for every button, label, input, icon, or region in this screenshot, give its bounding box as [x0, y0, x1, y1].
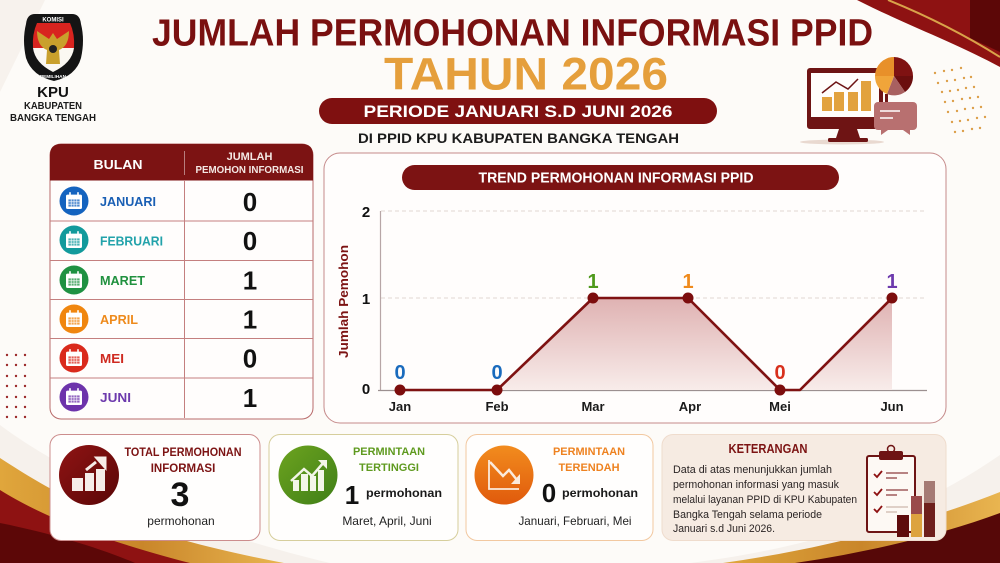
card: keterangan: KETERANGAN — [728, 442, 808, 456]
logo: KPU: BANGKA TENGAH — [10, 113, 96, 124]
row: Januari — [60, 186, 257, 217]
card: terendah: permohonan — [562, 486, 638, 500]
row: Maret — [60, 266, 257, 296]
card: tertinggi: permohonan — [366, 486, 442, 500]
line chart: 1 — [587, 271, 599, 293]
row: April — [60, 304, 257, 334]
subtitle: year: TAHUN 2026 — [384, 48, 668, 100]
title: JUMLAH PERMOHONAN INFORMASI PPID — [152, 12, 873, 54]
period pill — [319, 98, 717, 124]
logo: KPU: KABUPATEN — [24, 101, 82, 112]
row: Februari: 0 — [243, 226, 257, 256]
card: terendah — [466, 434, 653, 540]
logo: KPU: PEMILIHAN — [40, 74, 66, 79]
icon: growth chart — [278, 446, 338, 504]
card: tertinggi — [269, 434, 458, 540]
row: Februari: FEBRUARI — [100, 234, 163, 248]
line chart: 2 — [362, 204, 370, 221]
line chart: 1 — [362, 291, 370, 308]
table header: JUMLAH — [227, 151, 272, 163]
period pill: PERIODE JANUARI S.D JUNI 2026 — [364, 102, 672, 121]
chart title pill — [402, 165, 839, 190]
card: terendah: TERENDAH — [558, 462, 620, 474]
explanation text: Januari s.d Juni 2026. — [673, 523, 775, 535]
logo: KPU: KOMISI — [42, 18, 64, 24]
icon: rising bars — [59, 445, 119, 505]
line chart: 0 — [491, 362, 503, 384]
row: Januari: 0 — [243, 187, 257, 217]
row: Maret: MARET — [100, 273, 145, 288]
decoration: top right swoosh — [857, 0, 1000, 67]
card: total: permohonan — [147, 514, 215, 528]
explanation text — [673, 464, 857, 535]
card: total: TOTAL PERMOHONAN — [124, 447, 242, 459]
icon: monitor with charts — [800, 57, 917, 144]
row: Juni — [60, 382, 257, 413]
card: terendah: 0 — [542, 478, 556, 508]
line chart: 0 — [774, 362, 786, 384]
card: keterangan — [662, 434, 946, 540]
row: Mei — [60, 344, 257, 374]
icon: falling chart — [474, 446, 534, 504]
row: Juni: JUNI — [100, 390, 131, 405]
explanation text: melalui layanan PPID di KPU Kabupaten — [673, 494, 857, 506]
card: total: INFORMASI — [151, 463, 215, 475]
row: Mei: 0 — [243, 344, 257, 374]
row: April: 1 — [243, 304, 257, 334]
line chart: Jan — [389, 399, 411, 414]
line chart: 1 — [886, 271, 898, 293]
row: Juni: 1 — [243, 383, 257, 413]
decoration: bottom left swoosh — [0, 458, 284, 563]
logo: KPU — [10, 14, 96, 124]
line chart — [362, 204, 927, 414]
line chart: Mei — [769, 399, 791, 414]
table header: BULAN — [94, 157, 142, 172]
line chart: Feb — [485, 399, 509, 414]
card: tertinggi: PERMINTAAN — [353, 446, 425, 458]
line chart: 0 — [394, 362, 406, 384]
table header — [50, 144, 313, 180]
location text: DI PPID KPU KABUPATEN BANGKA TENGAH — [358, 130, 679, 146]
icon: clipboard and bars — [867, 446, 935, 537]
card: terendah: PERMINTAAN — [553, 446, 625, 458]
y axis title: Jumlah Pemohon — [336, 245, 351, 358]
card: total: 3 — [171, 476, 189, 514]
row: Februari — [60, 226, 257, 256]
card: tertinggi: TERTINGGI — [359, 462, 419, 474]
explanation text: Bangka Tengah selama periode — [673, 509, 822, 521]
card: terendah: Januari, Februari, Mei — [518, 514, 632, 528]
decoration: bottom right swoosh — [723, 492, 1000, 563]
row: Maret: 1 — [243, 266, 257, 296]
panel: monthly table — [50, 144, 313, 419]
row: Januari: JANUARI — [100, 194, 156, 209]
explanation text: Data di atas menunjukkan jumlah — [673, 464, 832, 476]
line chart: 1 — [682, 271, 694, 293]
table header: PEMOHON INFORMASI — [196, 165, 304, 176]
chart title pill: TREND PERMOHONAN INFORMASI PPID — [478, 170, 754, 186]
card: tertinggi: 1 — [345, 480, 359, 510]
decoration: dots left — [6, 354, 26, 418]
line chart: Jun — [880, 399, 904, 414]
explanation text: permohonan informasi yang masuk — [673, 479, 839, 491]
row: April: APRIL — [100, 312, 138, 327]
panel: trend chart — [324, 153, 946, 423]
line chart: 0 — [362, 381, 370, 398]
decoration: dots right — [934, 67, 986, 133]
card: tertinggi: Maret, April, Juni — [342, 514, 432, 528]
logo: KPU: KPU — [37, 84, 69, 101]
line chart: Apr — [679, 399, 701, 414]
card: total — [50, 434, 260, 540]
row: Mei: MEI — [100, 351, 124, 366]
line chart: Mar — [581, 399, 605, 414]
